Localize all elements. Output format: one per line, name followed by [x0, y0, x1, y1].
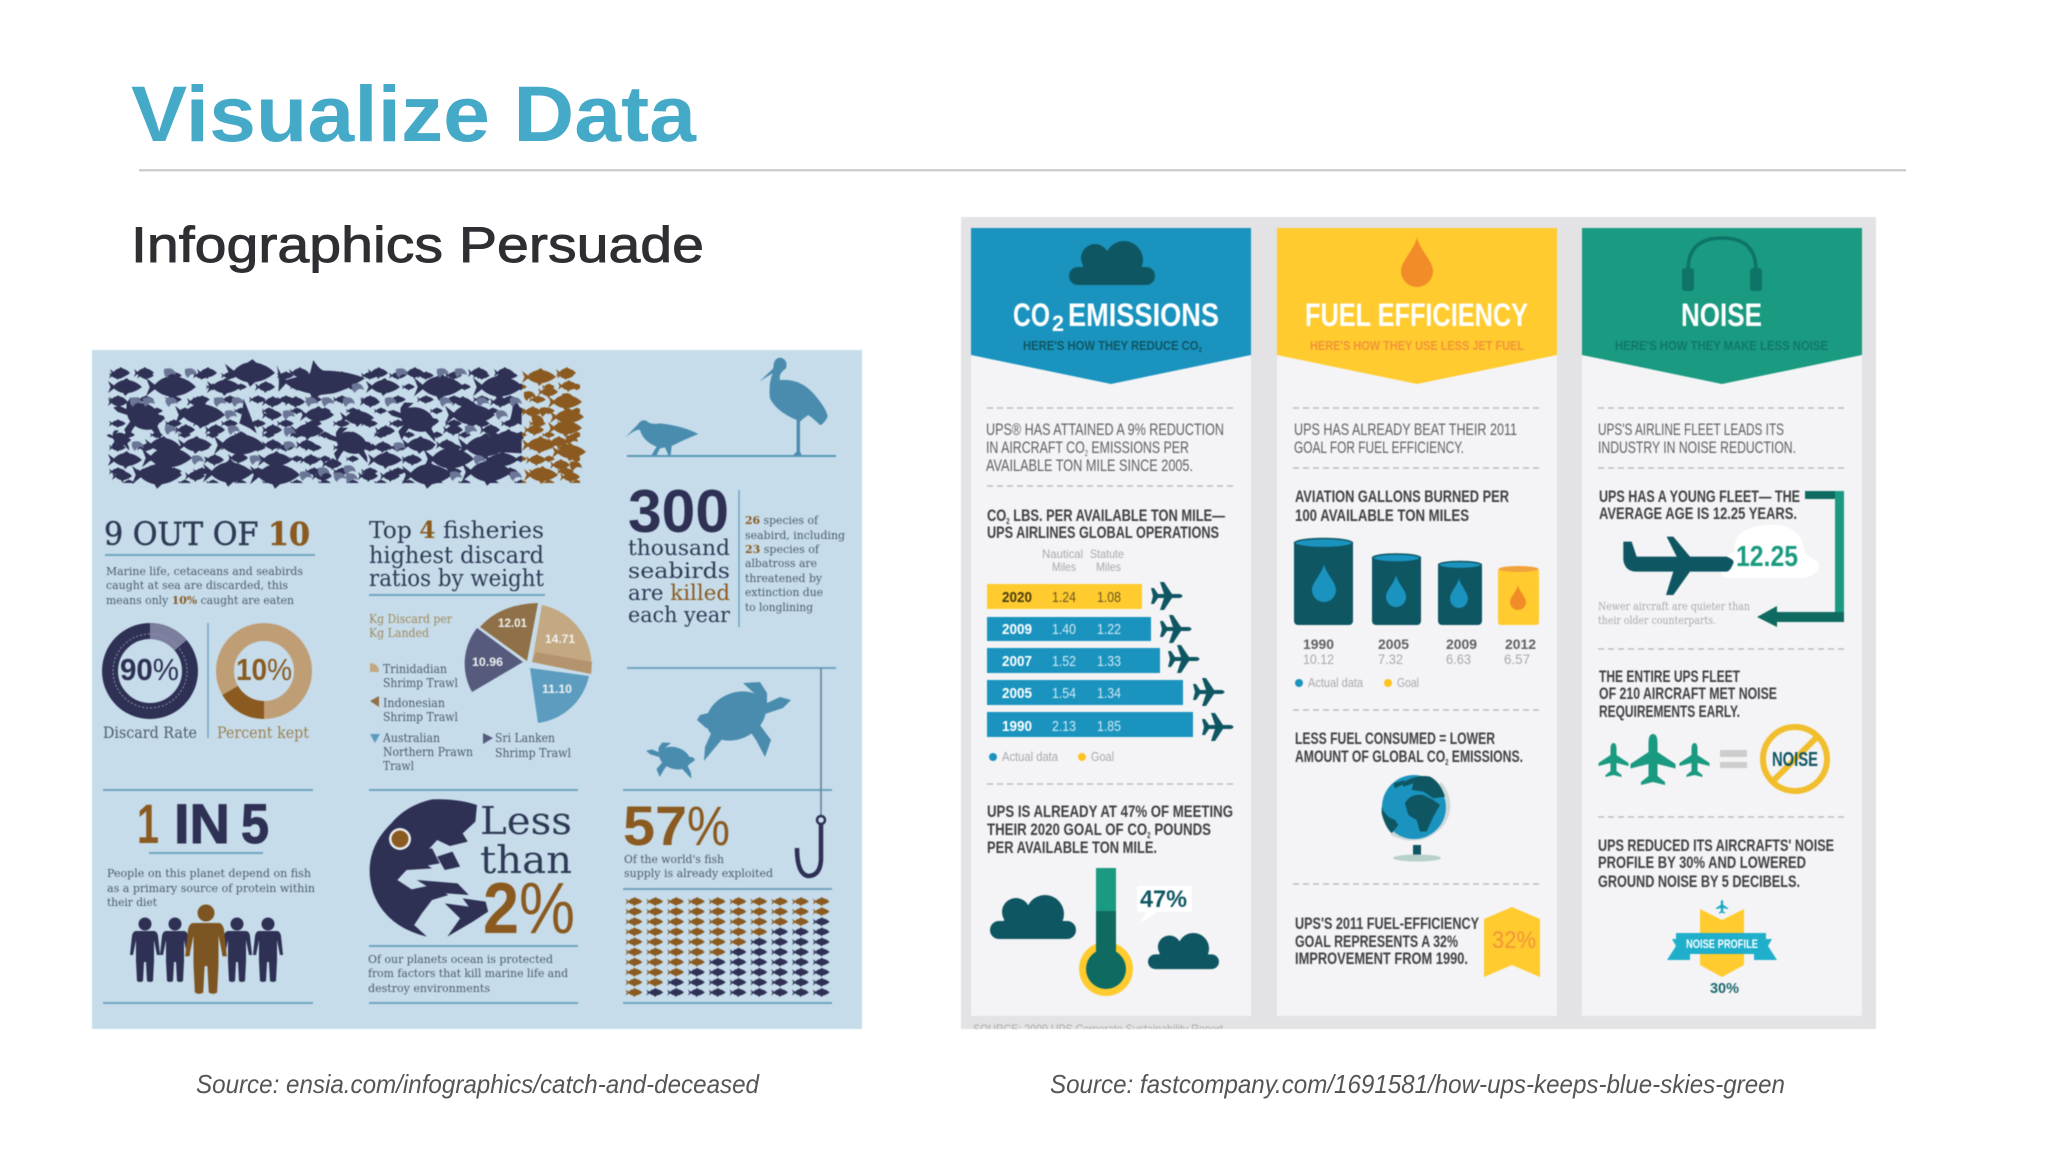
pie caption: Kg Landed	[369, 626, 429, 640]
bar chart: CO2 per ton mile: 1.54	[1052, 685, 1076, 702]
header banner: noise	[1582, 228, 1862, 384]
chart legend: Actual data	[1002, 750, 1058, 764]
bar chart: CO2 per ton mile: 2005	[1002, 685, 1032, 702]
text: young fleet: UPS HAS A YOUNG FLEET— THE	[1599, 487, 1800, 506]
pie legend: Shrimp Trawl	[383, 676, 458, 690]
chart title	[1295, 487, 1509, 525]
text: leads industry: UPS'S AIRLINE FLEET LEADS ITS	[1598, 420, 1784, 439]
icon: three planes	[1598, 734, 1710, 785]
label: discard rate: Discard Rate	[103, 724, 197, 742]
text: 9% reduction: UPS® HAS ATTAINED A 9% REDUCTION	[986, 420, 1224, 439]
icon: white cloud	[1721, 525, 1819, 578]
text: newer aircraft: Newer aircraft are quieter than	[1598, 599, 1750, 613]
chart title: UPS AIRLINES GLOBAL OPERATIONS	[987, 523, 1219, 542]
stat: less than 2%: %	[519, 869, 575, 949]
donut: discard rate 90%: 90%	[120, 652, 179, 687]
subheading: 2	[1198, 347, 1202, 354]
text: beat goal: UPS HAS ALREADY BEAT THEIR 2011	[1294, 420, 1517, 439]
fish school band	[107, 359, 586, 489]
icon: thermometer	[1079, 868, 1133, 996]
bar chart: CO2 per ton mile	[987, 582, 1234, 741]
icon: fish hook	[797, 668, 825, 876]
text: reduced noise profile: PROFILE BY 30% AND LOWERED	[1598, 853, 1806, 872]
subheading: HERE'S HOW THEY MAKE LESS NOISE	[1615, 339, 1828, 353]
pie legend: Trinidadian	[383, 662, 447, 676]
title rule	[139, 169, 1906, 172]
icon: small wading bird	[625, 420, 698, 455]
column: CO2 emissions	[971, 228, 1251, 996]
panel: UPS infographic	[961, 217, 1876, 1036]
barrel labels: 7.32	[1378, 651, 1403, 667]
icon: no noise	[1763, 727, 1827, 791]
text: species threatened: seabird, including	[745, 528, 846, 542]
stat: 300 thousand seabirds: thousand	[628, 536, 730, 560]
text: leads industry	[1598, 420, 1796, 457]
stat: 300 thousand seabirds: seabirds	[628, 559, 730, 583]
stat: 1 in 5: 5	[241, 792, 269, 855]
heading: top 4 fisheries	[369, 517, 545, 592]
text: 9% reduction: IN AIRCRAFT CO	[986, 438, 1122, 457]
text: entire fleet: OF 210 AIRCRAFT MET NOISE	[1599, 684, 1777, 703]
icon: five people	[130, 904, 283, 994]
text: leads industry: INDUSTRY IN NOISE REDUCTION.	[1598, 438, 1796, 457]
stat: less than 2%: Less	[480, 799, 572, 843]
stat: 1 in 5: IN	[174, 792, 230, 855]
badge: noise profile	[1667, 900, 1777, 977]
column: fuel efficiency	[1277, 228, 1557, 977]
icon: headphones	[1682, 238, 1762, 291]
panel: fish infographic	[92, 350, 862, 1029]
text: reduced noise profile	[1598, 836, 1834, 891]
callout: 47%	[1137, 886, 1192, 924]
text: ocean protected: from factors that kill marine life and	[368, 966, 569, 980]
chart column headers: Miles	[1096, 560, 1121, 574]
bar chart: CO2 per ton mile: 1.08	[1097, 589, 1121, 606]
text: 47% of goal: POUNDS	[1151, 820, 1211, 839]
icon: globe	[370, 799, 488, 937]
donut: percent kept 10%	[225, 632, 303, 710]
title: Visualize Data	[131, 69, 697, 158]
icon: large sea turtle	[697, 682, 791, 761]
pie legend: Sri Lanken	[495, 731, 555, 745]
donut: discard rate 90%	[110, 631, 190, 711]
fish grid chart: 57 of 100	[624, 897, 832, 998]
icon: fuel drop	[1401, 237, 1433, 287]
chart legend: Goal	[1091, 750, 1114, 764]
text: fish supply exploited	[624, 852, 774, 880]
text: young fleet: AVERAGE AGE IS 12.25 YEARS.	[1599, 504, 1797, 523]
bar chart: CO2 per ton mile: 1.34	[1097, 685, 1121, 702]
text: less fuel: AMOUNT OF GLOBAL CO	[1295, 747, 1504, 766]
text: less fuel: 2	[1445, 758, 1449, 767]
stat: less than 2%	[480, 799, 575, 949]
pie legend: Indonesian	[383, 696, 445, 710]
chart title: LBS. PER AVAILABLE TON MILE—	[1010, 506, 1225, 525]
stat: 12.25: 12.25	[1736, 541, 1798, 573]
bar chart: CO2 per ton mile: 1.40	[1052, 621, 1076, 638]
text: people depend on fish: People on this planet depend on fish	[107, 866, 312, 880]
header banner: CO2	[971, 228, 1251, 384]
barrel labels: 10.12	[1303, 651, 1334, 667]
text: 47% of goal: 2	[1147, 831, 1151, 840]
column: noise	[1582, 228, 1862, 997]
text: species threatened: to longlining	[745, 600, 814, 614]
text: less fuel	[1295, 729, 1523, 767]
chart column headers: Nautical	[1042, 547, 1083, 561]
bar chart: CO2 per ton mile: 2009	[1002, 621, 1032, 638]
text: less fuel: LESS FUEL CONSUMED = LOWER	[1295, 729, 1495, 748]
barrel labels	[1303, 636, 1536, 667]
pie legend: Shrimp Trawl	[495, 746, 571, 760]
text: 47% of goal: PER AVAILABLE TON MILE.	[987, 838, 1157, 857]
chart column headers	[1042, 547, 1124, 574]
stat: 300 thousand seabirds: each year	[628, 603, 731, 627]
stat: 1 in 5: 1	[137, 792, 159, 855]
pie caption	[369, 612, 452, 640]
chart legend	[1295, 676, 1419, 690]
text: ocean protected	[368, 952, 569, 995]
subtitle: Infographics Persuade	[131, 217, 704, 273]
chart legend: Goal	[1397, 676, 1419, 690]
barrel chart	[1294, 538, 1539, 625]
shark	[277, 360, 365, 400]
barrel labels: 6.57	[1504, 651, 1530, 667]
pie chart: 10.96	[472, 657, 503, 669]
text: marine life: means only 10% caught are eaten	[106, 593, 295, 607]
text: 47% of goal: UPS IS ALREADY AT 47% OF MEETING	[987, 802, 1233, 821]
heading: top 4 fisheries: Top 4 fisheries	[369, 517, 544, 544]
text: people depend on fish	[107, 866, 316, 909]
bird perch line	[627, 455, 836, 457]
barrel labels: 6.63	[1446, 651, 1471, 667]
chart title: AVIATION GALLONS BURNED PER	[1295, 487, 1509, 506]
text: species threatened: extinction due	[745, 585, 823, 599]
text: beat goal: GOAL FOR FUEL EFFICIENCY.	[1294, 438, 1464, 457]
text: marine life	[106, 564, 303, 607]
barrel labels: 2012	[1505, 636, 1536, 652]
subheading: HERE'S HOW THEY USE LESS JET FUEL	[1310, 339, 1524, 353]
stat: 57%: 57	[623, 794, 687, 857]
text: 9% reduction: AVAILABLE TON MILE SINCE 2005.	[986, 456, 1193, 475]
text: people depend on fish: their diet	[107, 895, 157, 909]
text: 47% of goal: THEIR 2020 GOAL OF CO	[987, 820, 1193, 839]
bar chart: CO2 per ton mile: 1.85	[1097, 718, 1121, 735]
bar chart: CO2 per ton mile: 2020	[1002, 589, 1032, 606]
text: reduced noise profile: GROUND NOISE BY 5 DECIBELS.	[1598, 872, 1800, 891]
heading: noise: NOISE	[1681, 297, 1762, 333]
chart legend	[989, 750, 1114, 764]
subheading: HERE'S HOW THEY REDUCE CO	[1023, 339, 1218, 353]
icon: large cloud	[990, 895, 1076, 939]
bar chart: CO2 per ton mile: 2007	[1002, 653, 1032, 670]
text: entire fleet	[1599, 667, 1777, 721]
pie legend	[370, 662, 571, 773]
pie legend: Northern Prawn	[383, 745, 473, 759]
stat: 300 thousand seabirds: 300	[628, 478, 729, 545]
pie chart	[465, 603, 592, 723]
icon: cloud	[1069, 241, 1155, 285]
text: 32% improvement: GOAL REPRESENTS A 32%	[1295, 932, 1458, 951]
icon: small cloud	[1148, 933, 1219, 969]
text: marine life: caught at sea are discarded, this	[106, 578, 288, 592]
badge: 32%	[1484, 907, 1540, 977]
chart title: 2	[1006, 517, 1010, 526]
text: people depend on fish: as a primary source of protein within	[107, 881, 316, 895]
text: species threatened: 23 species of	[745, 542, 820, 556]
icon: equals sign	[1720, 750, 1747, 768]
text: newer aircraft	[1598, 599, 1750, 627]
pie chart: 11.10	[542, 684, 572, 696]
heading: CO2 emissions: 2	[1052, 311, 1064, 336]
bar chart: CO2 per ton mile: 2.13	[1052, 718, 1076, 735]
pie legend: Trawl	[383, 759, 414, 773]
label: percent kept: Percent kept	[217, 724, 310, 742]
pie legend: Australian	[382, 731, 440, 745]
chart title	[987, 506, 1225, 542]
icon: desk globe	[1382, 775, 1448, 862]
icon: no noise: NOISE	[1772, 749, 1818, 771]
bar chart: CO2 per ton mile: 1.52	[1052, 653, 1076, 670]
bar chart: CO2 per ton mile: 1.24	[1052, 589, 1076, 606]
donut: percent kept 10%: 10%	[236, 652, 292, 687]
heading: top 4 fisheries: highest discard	[369, 543, 544, 569]
text: fish supply exploited: supply is already exploited	[624, 866, 774, 880]
text: species threatened	[745, 513, 846, 614]
heading: CO2 emissions	[1013, 297, 1219, 336]
bar chart: CO2 per ton mile: 1990	[1002, 718, 1032, 735]
source footnote: SOURCE: 2009 UPS Corporate Sustainability Report	[973, 1022, 1224, 1036]
pie caption: Kg Discard per	[369, 612, 452, 626]
header banner: fuel	[1277, 228, 1557, 384]
barrel labels: 2005	[1378, 636, 1409, 652]
text: 9% reduction	[986, 420, 1224, 475]
text: 32% improvement: IMPROVEMENT FROM 1990.	[1295, 949, 1468, 968]
text: species threatened: threatened by	[745, 571, 822, 585]
stat: 57%	[623, 794, 730, 857]
pie legend: Shrimp Trawl	[383, 710, 458, 724]
stat: 300 thousand seabirds: are killed	[628, 581, 730, 605]
stat: 30%: 30%	[1710, 981, 1739, 997]
chart column headers: Miles	[1052, 560, 1076, 574]
text: 32% improvement	[1295, 914, 1479, 968]
text: young fleet	[1599, 487, 1800, 523]
icon: small sea turtle	[646, 742, 695, 779]
badge: 32%: 32%	[1492, 927, 1536, 954]
text: beat goal	[1294, 420, 1517, 457]
text: 47% of goal	[987, 802, 1233, 857]
chart title: CO	[987, 506, 1012, 525]
arrow: return bracket	[1757, 491, 1844, 627]
barrel labels: 2009	[1446, 636, 1477, 652]
heading: CO2 emissions: EMISSIONS	[1068, 297, 1219, 333]
pie chart: 12.01	[498, 618, 528, 630]
caption: right source: Source: fastcompany.com/1691581/how-ups-keeps-blue-skies-green	[1050, 1069, 1785, 1099]
chart title: 100 AVAILABLE TON MILES	[1295, 506, 1469, 525]
text: fish supply exploited: Of the world's fish	[624, 852, 725, 866]
icon: stork	[759, 358, 828, 455]
text: reduced noise profile: UPS REDUCED ITS AIRCRAFTS' NOISE	[1598, 836, 1834, 855]
pie chart: 14.71	[545, 634, 576, 646]
text: 9% reduction: EMISSIONS PER	[1088, 438, 1189, 457]
chart column headers: Statute	[1090, 547, 1124, 561]
barrel labels: 1990	[1303, 636, 1334, 652]
bar chart: CO2 per ton mile: 1.22	[1097, 621, 1121, 638]
stat: 300 thousand seabirds	[628, 478, 731, 627]
text: entire fleet: THE ENTIRE UPS FLEET	[1599, 667, 1740, 686]
caption: left source: Source: ensia.com/infographics/catch-and-deceased	[196, 1069, 760, 1099]
text: 32% improvement: UPS'S 2011 FUEL-EFFICIENCY	[1295, 914, 1479, 933]
turtles in school	[113, 398, 165, 441]
heading: top 4 fisheries: ratios by weight	[369, 566, 545, 592]
text: less fuel: EMISSIONS.	[1448, 747, 1523, 766]
rays	[239, 397, 522, 453]
text: ocean protected: Of our planets ocean is protected	[368, 952, 554, 966]
stat: less than 2%: 2	[483, 869, 519, 949]
heading: 9 out of 10: 9 OUT OF 10	[104, 515, 310, 553]
heading: fuel efficiency: FUEL EFFICIENCY	[1305, 297, 1528, 333]
stat: 57%: %	[687, 794, 730, 857]
stat: less than 2%: than	[480, 838, 572, 882]
badge: noise profile: NOISE PROFILE	[1686, 937, 1758, 951]
callout: 47%: 47%	[1140, 886, 1187, 913]
text: newer aircraft: their older counterparts.	[1598, 613, 1716, 627]
text: marine life: Marine life, cetaceans and seabirds	[106, 564, 303, 578]
text: 9% reduction: 2	[1085, 449, 1088, 458]
chart legend: Actual data	[1308, 676, 1363, 690]
stat: 1 in 5	[137, 792, 269, 855]
text: ocean protected: destroy environments	[368, 981, 490, 995]
icon: plane side view	[1623, 537, 1734, 595]
bar chart: CO2 per ton mile: 1.33	[1097, 653, 1121, 670]
text: entire fleet: REQUIREMENTS EARLY.	[1599, 702, 1740, 721]
text: species threatened: albatross are	[745, 556, 817, 570]
heading: CO2 emissions: CO	[1013, 297, 1050, 333]
text: species threatened: 26 species of	[745, 513, 819, 527]
